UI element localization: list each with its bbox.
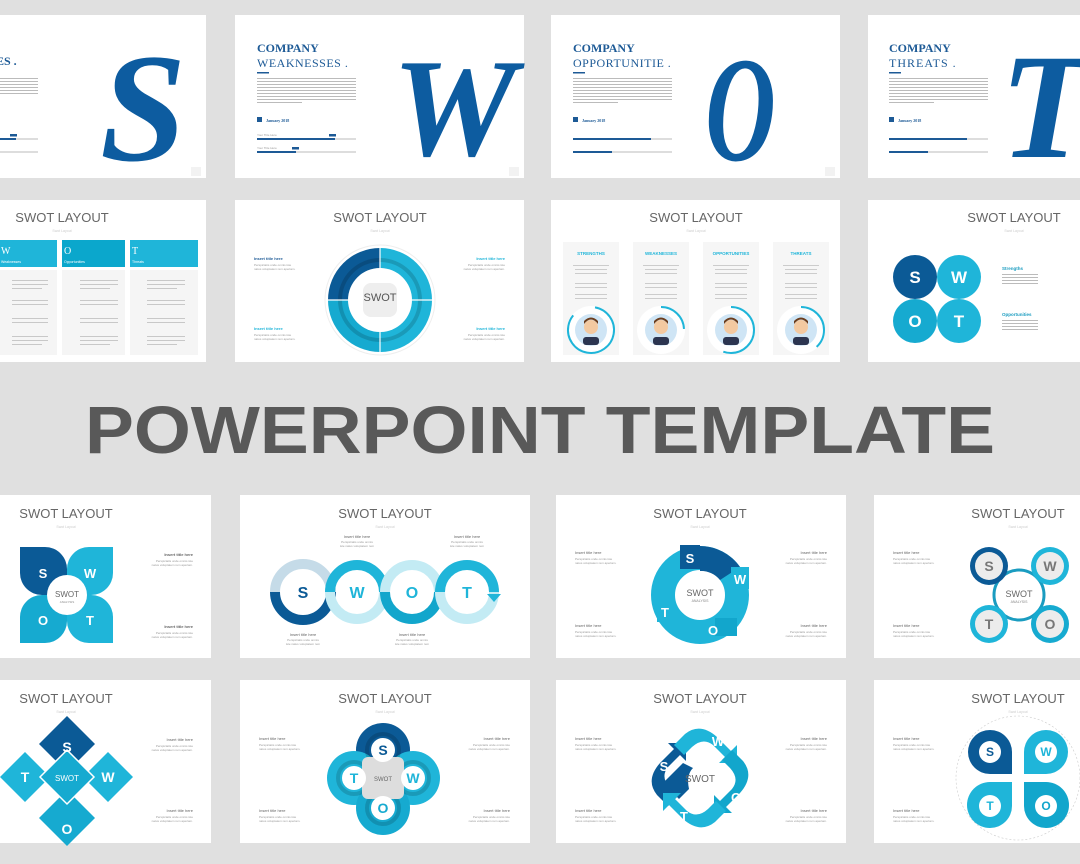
slide: ring with squares: Swot Layout (690, 525, 710, 529)
slide: swot ring: Perspiciatis unde omnis iste (468, 333, 505, 337)
slide: wave swot: SWOT LAYOUT (338, 506, 432, 521)
slide: arrows swot: Insert title here (801, 736, 828, 741)
slide: company opportunities: COMPANY (573, 41, 635, 55)
slide: linked circles: S (984, 558, 994, 574)
slide: ring with squares: Insert title here (801, 550, 828, 555)
slide: swot ring: natus voluptatem rem aperiam. (464, 337, 505, 341)
slide: wave swot: Swot Layout (375, 525, 395, 529)
slide: ring with squares: Insert title here (575, 550, 602, 555)
slide: flower swot: natus voluptatem rem aperiam. (469, 747, 510, 751)
slide: flower swot: Insert title here (259, 808, 286, 813)
slide: clover swot: W (1040, 745, 1052, 759)
slide: swot four circles: SWOT LAYOUT (967, 210, 1061, 225)
slide: flower swot: S (378, 742, 388, 758)
slide: petal swot: natus voluptatem rem aperiam. (152, 563, 193, 567)
slide: ring with squares: Perspiciatis unde omnis iste (575, 630, 613, 634)
slide: company threats: COMPANY (889, 41, 951, 55)
slide: petal swot: T (86, 613, 94, 628)
slide: wave swot: iste natus voluptatem rem (395, 642, 430, 646)
slide: swot four circles (868, 200, 1080, 362)
slide: flower swot: O (378, 800, 389, 816)
slide: clover swot: S (986, 745, 994, 759)
slide: clover swot: Perspiciatis unde omnis iste (893, 815, 931, 819)
slide: company weaknesses: Your Title Here (257, 133, 277, 137)
slide: diamond swot: O (62, 821, 73, 837)
slide: diamond swot: T (21, 769, 30, 785)
slide: wave swot: iste natus voluptatem rem (340, 544, 375, 548)
slide: wave swot: iste natus voluptatem rem (450, 544, 485, 548)
slide: swot ring: natus voluptatem rem aperiam. (254, 337, 296, 341)
slide: ring with squares: natus voluptatem rem aperiam. (575, 561, 617, 565)
slide: wave swot: Perspiciatis unde omnis (341, 540, 373, 544)
slide: diamond swot (0, 680, 211, 846)
slide: clover swot: Insert title here (893, 736, 920, 741)
slide: flower swot (240, 680, 530, 843)
slide: swot four circles: Strengths (1002, 266, 1023, 271)
slide: petal swot: Perspiciatis unde omnis iste (156, 631, 193, 635)
slide: clover swot: SWOT LAYOUT (971, 691, 1065, 706)
slide: ring with squares: natus voluptatem rem aperiam. (575, 634, 617, 638)
slide: flower swot: Perspiciatis unde omnis iste (473, 743, 510, 747)
slide: petal swot (0, 495, 211, 658)
slide: diamond swot: natus voluptatem rem aperiam. (152, 819, 193, 823)
slide: linked circles: Insert title here (893, 550, 920, 555)
slide: swot ring (235, 200, 524, 362)
slide: arrows swot: natus voluptatem rem aperiam. (575, 819, 617, 823)
slide: clover swot (874, 680, 1080, 843)
slide: swot four circles: W (951, 268, 968, 287)
slide: clover swot: natus voluptatem rem aperiam. (893, 747, 935, 751)
slide: swot ring: SWOT (364, 292, 397, 304)
slide: linked circles: Perspiciatis unde omnis iste (893, 557, 931, 561)
slide: diamond swot: SWOT LAYOUT (19, 691, 113, 706)
slide: swot cards with avatars: OPPORTUNITIES (713, 251, 749, 256)
slide: ring with squares: Perspiciatis unde omnis iste (790, 630, 827, 634)
slide: arrows swot: Perspiciatis unde omnis iste (575, 815, 613, 819)
slide: linked circles: natus voluptatem rem aperiam. (893, 561, 935, 565)
slide: wave swot: Perspiciatis unde omnis (287, 638, 319, 642)
letter S: S (100, 22, 186, 194)
slide: flower swot: Perspiciatis unde omnis iste (259, 743, 297, 747)
slide: ring with squares: SWOT (686, 588, 714, 598)
slide: clover swot: O (1041, 799, 1051, 813)
slide: swot columns: O (64, 246, 71, 257)
slide: petal swot: O (38, 613, 48, 628)
slide: arrows swot: S (660, 759, 669, 774)
slide: flower swot: Insert title here (259, 736, 286, 741)
slide: swot cards with avatars: WEAKNESSES (645, 251, 677, 256)
slide: diamond swot: S (62, 739, 72, 755)
slide: arrows swot: Perspiciatis unde omnis iste (790, 815, 827, 819)
slide: swot four circles: Swot Layout (1004, 229, 1024, 233)
slide: flower swot: T (350, 770, 359, 786)
slide: wave swot: T (462, 585, 472, 602)
slide: swot ring: Perspiciatis unde omnis iste (254, 333, 292, 337)
slide: swot columns: T (132, 246, 138, 257)
slide: ring with squares: Perspiciatis unde omnis iste (575, 557, 613, 561)
slide: swot columns: SWOT LAYOUT (15, 210, 109, 225)
slide: company threats (868, 15, 1080, 190)
slide: swot ring: Perspiciatis unde omnis iste (468, 263, 505, 267)
slide: swot columns: Opportunities (64, 260, 85, 264)
slide: company weaknesses (235, 15, 525, 186)
slide: petal swot: natus voluptatem rem aperiam. (152, 635, 193, 639)
slide: arrows swot: Insert title here (575, 736, 602, 741)
slide: swot columns: W (1, 246, 11, 257)
slide: arrows swot: Perspiciatis unde omnis iste (575, 743, 613, 747)
slide: petal swot: SWOT (55, 590, 79, 599)
slide: petal swot: W (84, 566, 97, 581)
slide: wave swot: S (298, 585, 309, 602)
slide: company strengths (cropped) (0, 15, 206, 194)
slide: diamond swot: Perspiciatis unde omnis iste (156, 815, 193, 819)
slide: ring with squares: natus voluptatem rem aperiam. (786, 634, 827, 638)
slide: linked circles: SWOT LAYOUT (971, 506, 1065, 521)
slide: petal swot: Perspiciatis unde omnis iste (156, 559, 193, 563)
letter O: O (705, 27, 776, 193)
slide: swot cards with avatars: SWOT LAYOUT (649, 210, 743, 225)
slide: swot four circles: T (954, 312, 965, 331)
slide: clover swot: T (986, 799, 994, 813)
slide: flower swot: natus voluptatem rem aperiam. (469, 819, 510, 823)
slide: arrows swot: SWOT LAYOUT (653, 691, 747, 706)
slide: wave swot: Insert title here (344, 534, 371, 539)
slide: swot columns: Weaknesses (1, 260, 21, 264)
slide: ring with squares (556, 495, 846, 658)
slide: flower swot: Insert title here (484, 808, 511, 813)
slide: company weaknesses: Your Title Here (257, 146, 277, 150)
slide: wave swot: Perspiciatis unde omnis (451, 540, 483, 544)
slide: company threats: THREATS . (889, 56, 957, 70)
slide: swot cards with avatars (551, 200, 840, 362)
slide: flower swot: Perspiciatis unde omnis iste (259, 815, 297, 819)
slide: ring with squares: O (708, 623, 718, 638)
slide: arrows swot: natus voluptatem rem aperiam. (786, 819, 827, 823)
slide: flower swot: Swot Layout (375, 710, 395, 714)
slide: swot cards with avatars: STRENGTHS (577, 251, 605, 256)
slide: flower swot: natus voluptatem rem aperiam. (259, 819, 301, 823)
slide: diamond swot: W (101, 769, 115, 785)
slide: ring with squares: SWOT LAYOUT (653, 506, 747, 521)
slide: flower swot: SWOT (374, 777, 392, 783)
slide: arrows swot: natus voluptatem rem aperiam. (575, 747, 617, 751)
slide: arrows swot: Insert title here (801, 808, 828, 813)
slide: linked circles: W (1043, 558, 1057, 574)
slide: ring with squares: natus voluptatem rem aperiam. (786, 561, 827, 565)
slide: swot four circles: Opportunities (1002, 312, 1032, 317)
slide: swot ring: Insert title here (476, 256, 506, 261)
slide: swot cards with avatars: Swot Layout (686, 229, 706, 233)
slide: swot ring: Insert title here (254, 256, 283, 261)
slide: diamond swot: SWOT (55, 774, 79, 783)
slide: clover swot: Insert title here (893, 808, 920, 813)
slide: company opportunities (551, 15, 840, 193)
slide: linked circles: Perspiciatis unde omnis iste (893, 630, 931, 634)
slide: company weaknesses: WEAKNESSES . (257, 56, 348, 70)
slide: arrows swot: natus voluptatem rem aperiam. (786, 747, 827, 751)
slide: petal swot: S (39, 566, 48, 581)
slide: flower swot: Insert title here (484, 736, 511, 741)
slide: swot columns: Threats (132, 260, 144, 264)
slide: linked circles: natus voluptatem rem aperiam. (893, 634, 935, 638)
slide: flower swot: Perspiciatis unde omnis iste (473, 815, 510, 819)
slide: arrows swot: Perspiciatis unde omnis iste (790, 743, 827, 747)
slide: linked circles: Swot Layout (1008, 525, 1028, 529)
slide: linked circles (874, 495, 1080, 658)
slide: arrows swot: O (731, 790, 741, 805)
slide: swot columns (0, 200, 206, 362)
slide: swot ring: Swot Layout (370, 229, 390, 233)
slide: swot cards with avatars: THREATS (791, 251, 811, 256)
slide: linked circles: O (1045, 616, 1056, 632)
slide: wave swot: Insert title here (454, 534, 481, 539)
slide: linked circles: ANALYSIS (1011, 600, 1028, 604)
slide: wave swot: iste natus voluptatem rem (286, 642, 321, 646)
slide: arrows swot: T (680, 809, 688, 824)
slide: petal swot: ANALYSIS (60, 600, 74, 604)
slide: wave swot: O (406, 585, 418, 602)
slide: diamond swot: Insert title here (167, 808, 194, 813)
letter W: W (392, 31, 525, 186)
slide: company opportunities: January 2018 (582, 118, 605, 123)
slide: clover swot: natus voluptatem rem aperiam. (893, 819, 935, 823)
slide: wave swot (240, 495, 530, 658)
slide: company opportunities: OPPORTUNITIE . (573, 56, 671, 70)
slide: linked circles: SWOT (1006, 589, 1033, 599)
slide: ring with squares: ANALYSIS (692, 599, 709, 603)
slide: ring with squares: Insert title here (801, 623, 828, 628)
slide: petal swot: Insert title here (164, 552, 194, 557)
slide: flower swot: natus voluptatem rem aperiam. (259, 747, 301, 751)
slide: diamond swot: Insert title here (167, 737, 194, 742)
slide: arrows swot: W (712, 734, 725, 749)
avatars (564, 303, 825, 357)
slide: arrows swot: Swot Layout (690, 710, 710, 714)
slide: linked circles: T (985, 616, 994, 632)
slide: arrows swot: Insert title here (575, 808, 602, 813)
slide: clover swot: Perspiciatis unde omnis iste (893, 743, 931, 747)
slide: ring with squares: W (734, 572, 747, 587)
slide: ring with squares: S (686, 551, 695, 566)
slide: ring with squares: T (661, 605, 669, 620)
slide: wave swot: Insert title here (399, 632, 426, 637)
slide: ring with squares: Perspiciatis unde omnis iste (790, 557, 827, 561)
title: POWERPOINT TEMPLATE (85, 393, 995, 468)
slide: petal swot: Insert title here (164, 624, 194, 629)
slide: arrows swot (556, 680, 846, 843)
slide: flower swot: SWOT LAYOUT (338, 691, 432, 706)
slide: company threats: January 2018 (898, 118, 921, 123)
slide: swot ring: Perspiciatis unde omnis iste (254, 263, 292, 267)
slide: wave swot: Perspiciatis unde omnis (396, 638, 428, 642)
slide: clover swot: Swot Layout (1008, 710, 1028, 714)
slide: swot ring: natus voluptatem rem aperiam. (464, 267, 505, 271)
slide: swot ring: natus voluptatem rem aperiam. (254, 267, 296, 271)
slide: swot four circles: O (908, 312, 922, 331)
slide: diamond swot: Perspiciatis unde omnis iste (156, 744, 193, 748)
slide: wave swot: W (349, 585, 365, 602)
slide: company weaknesses: COMPANY (257, 41, 319, 55)
slide: petal swot: Swot Layout (56, 525, 76, 529)
slide: swot ring: SWOT LAYOUT (333, 210, 427, 225)
slide: company weaknesses: January 2018 (266, 118, 289, 123)
slide: swot ring: Insert title here (476, 326, 506, 331)
slide: swot four circles: S (909, 268, 921, 287)
slide: petal swot: SWOT LAYOUT (19, 506, 113, 521)
slide: wave swot: Insert title here (290, 632, 317, 637)
slide: diamond swot: natus voluptatem rem aperiam. (152, 748, 193, 752)
slide: flower swot: W (406, 770, 420, 786)
slide: linked circles: Insert title here (893, 623, 920, 628)
slide: ring with squares: Insert title here (575, 623, 602, 628)
slide: arrows swot: SWOT (685, 774, 715, 785)
slide: diamond swot: Swot Layout (56, 710, 76, 714)
slide: swot ring: Insert title here (254, 326, 283, 331)
slide: swot columns: Swot Layout (52, 229, 72, 233)
